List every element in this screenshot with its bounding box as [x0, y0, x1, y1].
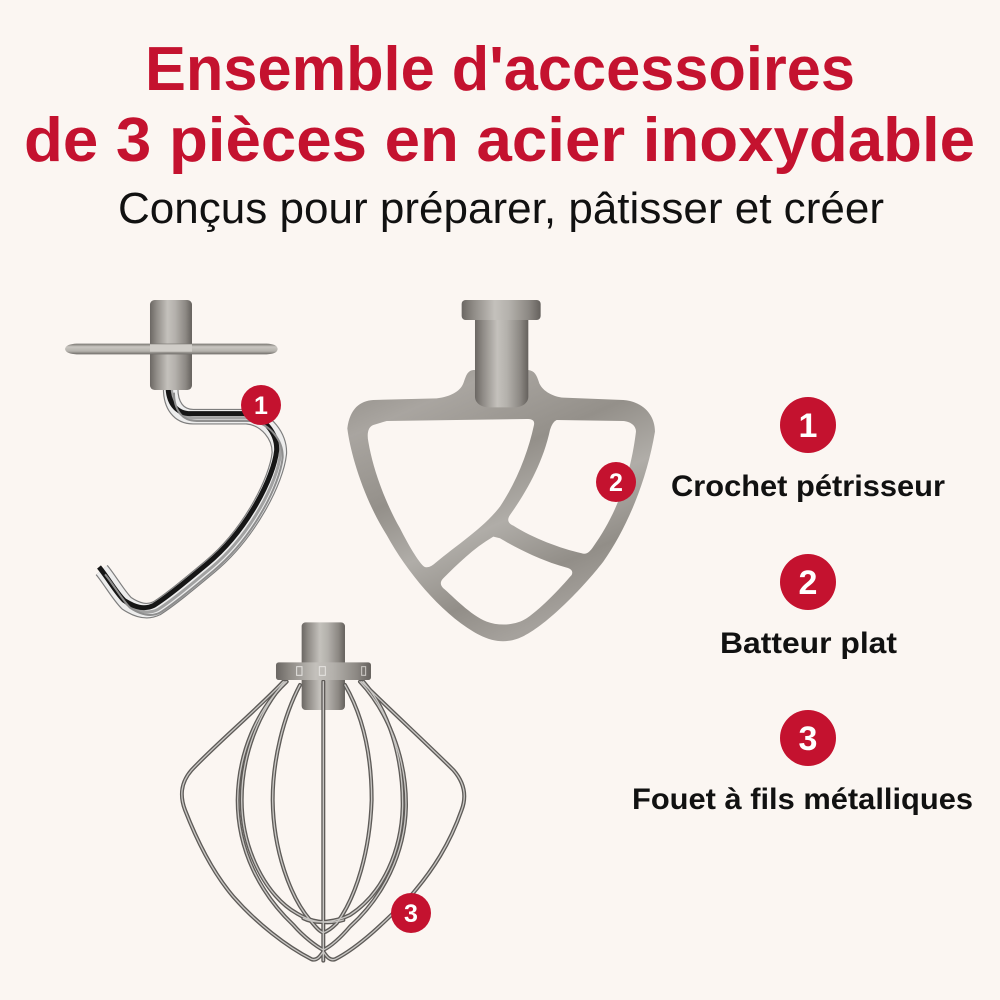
whisk wires [182, 682, 464, 961]
wire whisk [182, 622, 464, 961]
marker 1: 1 [254, 392, 268, 420]
legend item 1: 1 [799, 407, 817, 445]
legend item 3: 3 [799, 720, 817, 758]
legend item 2: Batteur plat [720, 627, 897, 660]
beater shaft [475, 318, 528, 407]
beater plate [347, 370, 655, 641]
marker 2: 2 [609, 469, 623, 497]
whisk shaft [302, 622, 345, 710]
subtitle: Conçus pour préparer, pâtisser et créer [118, 184, 884, 233]
whisk collar [276, 662, 371, 680]
legend item 1 [671, 397, 945, 503]
title [24, 35, 975, 175]
legend item 3 [632, 710, 973, 816]
marker 3 [391, 893, 431, 933]
title: Ensemble d'accessoires [145, 35, 855, 104]
legend item 1: Crochet pétrisseur [671, 470, 945, 503]
beater cap [462, 300, 541, 320]
dough hook [65, 300, 283, 615]
legend item 3: Fouet à fils métalliques [632, 783, 973, 816]
legend item 2 [720, 554, 897, 660]
flat beater [347, 300, 655, 641]
hook disc [65, 344, 278, 354]
marker 1 [241, 385, 281, 425]
legend item 2: 2 [799, 564, 817, 602]
marker 3: 3 [404, 900, 418, 928]
marker 2 [596, 462, 636, 502]
hook wire [99, 385, 283, 615]
title: de 3 pièces en acier inoxydable [24, 106, 975, 175]
hook shaft [150, 300, 192, 390]
